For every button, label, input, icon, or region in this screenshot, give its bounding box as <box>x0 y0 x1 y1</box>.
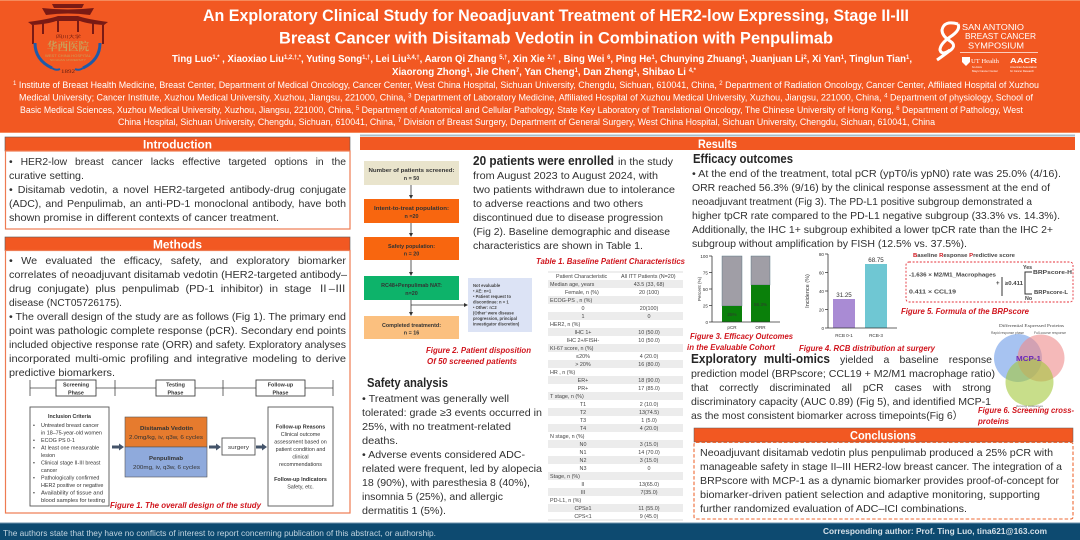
table 1: baseline characteristics: 0 <box>648 466 650 472</box>
caption: figure 2 <box>426 345 531 366</box>
intro text: (ADC), and Penpulimab, an anti-PD-1 monoclonal antibody, have both <box>9 199 346 210</box>
arrow <box>256 444 267 450</box>
inclusion criteria box: in 18–75-year-old women <box>41 430 102 436</box>
safety text: related were frequent, led by alopecia <box>362 464 542 475</box>
not evaluable box: investigator discretion) <box>473 322 520 326</box>
inclusion criteria box: Clinical stage II-III breast <box>41 460 101 466</box>
table 1: baseline characteristics: 43.5 (33, 68) <box>634 282 664 288</box>
logo: San Antonio Breast Cancer Symposium: UT Health <box>971 59 999 65</box>
figure 5: BRPscore formula: BRPscore-L <box>1034 290 1069 296</box>
panel: methods <box>5 237 350 513</box>
table 1: baseline characteristics: 16 (80.0) <box>638 362 660 368</box>
follow-up box: Clinical outcome <box>281 432 320 438</box>
methods text: correlates of neoadjuvant disitamab vedotin (HER2-targeted antibody– <box>9 270 347 281</box>
intro text: • Disitamab vedotin, a novel HER2-targeted antibody-drug conjugate <box>9 185 346 196</box>
inclusion criteria box: Availability of tissue and <box>41 490 103 496</box>
caption: table 1: Table 1. Baseline Patient Characteristics <box>536 256 685 266</box>
figure 3: efficacy bar chart: 25% <box>727 312 737 317</box>
logo: San Antonio Breast Cancer Symposium: Mays Cancer Center <box>972 69 998 73</box>
table 1: baseline characteristics: 7(35.0) <box>640 490 658 496</box>
figure 6: Venn diagram: Among outcomes <box>1016 404 1044 408</box>
table 1: baseline characteristics: T1 <box>580 402 586 408</box>
phase timeline: Testing <box>166 382 185 388</box>
header band <box>0 0 1080 133</box>
figure 2: patient disposition flowchart: Completed treatmentd: <box>382 323 441 329</box>
figure 6: Venn diagram: Differential Expressed Proteins <box>999 323 1064 328</box>
table 1: baseline characteristics: N stage, n (%) <box>550 434 585 440</box>
phase timeline: Follow-up <box>268 382 294 388</box>
caption: figure 3 <box>687 331 793 352</box>
follow-up box: Safety, etc. <box>287 484 314 490</box>
methods text: incorporated multi-omic profiling and integrative modeling to derive <box>9 354 346 365</box>
heading: Methods: Methods <box>153 238 202 252</box>
figure 5: BRPscore formula: + <box>996 281 1000 287</box>
treatment box: Disitamab Vedotin <box>140 426 193 432</box>
methods text: drug conjugate) plus penpulimab (PD-1 inhibitor) in stage Ⅱ–Ⅲ <box>9 284 346 295</box>
figure 4: RCB bar chart: 31.25 <box>836 292 852 299</box>
follow-up box: patient condition and <box>276 447 325 453</box>
caption: figure 3: Figure 3. Efficacy Outcomes <box>690 331 793 341</box>
inclusion criteria box: • <box>33 446 35 452</box>
affiliations: Medical University; Cancer Institute, Xuzhou Medical University, Xuzhou, Jiangsu, 221000, China, 3 Department of Laboratory Medicine, Affiliated Hospital of Xuzhou Medical University, Xuzhou, Jiangsu, 221000, China, 4 Department of physiology, School of <box>19 92 1034 102</box>
table 1: baseline characteristics: PR+ <box>578 386 588 392</box>
exploratory multi-omics text <box>691 352 995 422</box>
exploratory multi-omics text: that correctly discriminated all pCR cases with strong <box>691 383 991 394</box>
figure 2: patient disposition flowchart: n=20 <box>405 291 418 297</box>
panel: conclusions <box>694 428 1073 519</box>
methods text <box>9 256 347 379</box>
logo: San Antonio Breast Cancer Symposium: for Cancer Research <box>1010 69 1034 73</box>
caption: figure 6: proteins <box>977 416 1009 426</box>
exploratory multi-omics text: as the most consistent biomarker across timepoints(Fig 6） <box>691 410 963 422</box>
table 1: baseline characteristics <box>536 256 685 520</box>
not evaluable box <box>468 278 532 332</box>
inclusion criteria box <box>30 407 109 506</box>
table 1: baseline characteristics: 13(65.0) <box>639 482 659 488</box>
enrollment text: (Fig 2). Baseline demographic and disease <box>473 227 670 238</box>
figure 5: BRPscore formula: ≥0.411 <box>1005 281 1023 287</box>
treatment box <box>125 417 207 477</box>
title: An Exploratory Clinical Study for Neoadjuvant Treatment of HER2-low Expressing, Stage II-III <box>203 6 909 25</box>
figure 2: patient disposition flowchart: Safety population: <box>388 244 435 250</box>
figure 4: RCB bar chart <box>799 252 936 353</box>
exploratory multi-omics text: yielded a baseline response <box>840 355 992 366</box>
figure 4: RCB bar chart: Incidence (%) <box>805 274 811 308</box>
logo: West China Hospital: WEST CHINA HOSPITAL <box>45 54 91 58</box>
authors: Ting Luo1,* , Xiaoxiao Liu1,2,†,*, Yuting Song1,†, Lei Liu3,4,†, Aaron Qi Zhang 5,†, Xin Xie 2,† , Bing Wei 6, Ping He1, Chunying Zhuang1, Juanjuan Li2, Xi Yan1, Tinglun Tian1, <box>172 54 912 65</box>
logo: San Antonio Breast Cancer Symposium: BREAST CANCER <box>965 31 1036 41</box>
inclusion criteria box: • <box>33 460 35 466</box>
follow-up box: assessment based on <box>274 440 327 446</box>
phase timeline <box>30 380 333 396</box>
figure 2: patient disposition flowchart <box>364 161 532 366</box>
enrollment text: discontinued due to disease progression <box>473 213 663 224</box>
table 1: baseline characteristics: 10 (50.0) <box>638 338 660 344</box>
figure 4: RCB bar chart: RCB-3 <box>869 333 883 338</box>
figure 4: RCB bar chart: 20 <box>819 308 824 312</box>
table 1: baseline characteristics: PD-L1, n (%) <box>550 498 581 504</box>
figure 3: efficacy bar chart: 50 <box>703 287 708 292</box>
table 1: baseline characteristics: CPS≥1 <box>574 506 592 512</box>
affiliations <box>13 80 1039 127</box>
figure 4: RCB bar chart: RCB 0-1 <box>835 333 853 338</box>
table 1: baseline characteristics: IHC 2+/FISH- <box>567 338 599 344</box>
figure 2: patient disposition flowchart: n = 16 <box>404 330 419 336</box>
exploratory multi-omics text: Exploratory multi-omics <box>691 352 830 366</box>
intro text <box>9 157 346 224</box>
logo: San Antonio Breast Cancer Symposium: SYMPOSIUM <box>968 40 1024 50</box>
inclusion criteria box: • <box>33 423 35 429</box>
table 1: baseline characteristics: N2 <box>580 458 586 464</box>
table 1: baseline characteristics: 0 <box>582 306 584 312</box>
logo: West China Hospital: 四川大学 <box>56 33 81 39</box>
safety text: tolerated: grade ≥3 events occurred in <box>362 408 542 419</box>
phase timeline: Phase <box>273 390 288 396</box>
logo: San Antonio Breast Cancer Symposium: San Antonio <box>972 65 982 69</box>
surgery box <box>222 438 255 455</box>
table 1: baseline characteristics: HER2, n (%) <box>550 322 580 328</box>
safety text: dermatitis 1 (5%). <box>362 506 446 517</box>
figure 4: RCB bar chart: 80 <box>819 252 824 257</box>
intro text: • HER2-low breast cancer lacks effective targeted options in the <box>9 157 346 168</box>
heading: Results: Results <box>698 139 737 151</box>
logo: San Antonio Breast Cancer Symposium: SAN ANTONIO <box>962 22 1024 32</box>
figure 2: patient disposition flowchart: RC48+Penpulimab NAT: <box>381 283 442 289</box>
not evaluable box: • Patient request to <box>473 294 511 299</box>
methods text: • We evaluated the efficacy, safety, and exploratory biomarker <box>9 256 347 267</box>
figure 2: patient disposition flowchart: Intent-to-treat population: <box>374 206 449 212</box>
table 1: baseline characteristics: 0 <box>648 314 650 320</box>
table 1: baseline characteristics: Median age, years <box>550 282 595 288</box>
heading: safety analysis: Safety analysis <box>367 376 448 390</box>
follow-up box <box>268 407 333 506</box>
surgery box: surgery <box>228 445 249 451</box>
figure 2: patient disposition flowchart: n =20 <box>405 214 418 220</box>
inclusion criteria box: lesion <box>41 453 55 459</box>
follow-up box: Follow-up Reasons <box>276 424 325 430</box>
phase timeline: Phase <box>68 390 84 396</box>
table 1: baseline characteristics: 18 (90.0) <box>638 378 660 384</box>
phase timeline: Phase <box>168 390 183 396</box>
panel: results <box>360 134 1075 520</box>
figure 6: Venn diagram: MCP-1 <box>1016 354 1041 363</box>
efficacy outcomes <box>692 152 1061 250</box>
treatment box: 200mg, iv, q3w, 6 cycles <box>133 465 200 471</box>
figure 2: patient disposition flowchart: n = 50 <box>404 176 419 182</box>
table 1: baseline characteristics: 1 <box>582 314 584 320</box>
table 1: baseline characteristics: N1 <box>580 450 586 456</box>
figure 5: BRPscore formula <box>901 253 1073 316</box>
intro text: shown promise in different contexts of cancer treatment. <box>9 213 279 224</box>
methods text: • The overall design of the study are as follows (Fig 1). The primary end <box>9 312 346 323</box>
methods text: disease (NCT05726175). <box>9 298 122 309</box>
caption: figure 2: Of 50 screened patients <box>427 356 517 366</box>
table 1: baseline characteristics: ECOG-PS , n (%) <box>550 298 592 304</box>
inclusion criteria box: At least one measurable <box>41 446 99 452</box>
inclusion criteria box: • <box>33 490 35 496</box>
efficacy text: ORR reached 56.3% (9/16) by the clinical response assessment at the end of <box>692 183 1050 194</box>
logo: West China Hospital <box>28 4 108 75</box>
arrow <box>209 444 221 450</box>
follow-up box: Follow-up Indicators <box>274 477 327 483</box>
table 1: baseline characteristics: IHC 1+ <box>575 330 591 336</box>
inclusion criteria box: • <box>33 438 35 444</box>
safety text: deaths. <box>362 436 398 447</box>
figure 3: efficacy bar chart: 75 <box>703 270 708 276</box>
efficacy text: higher tpCR rate compared to the PD-L1 negative subgroup (33.3% vs. 14.3%). <box>692 211 1060 222</box>
title <box>203 6 909 48</box>
safety text: • Treatment was generally well <box>362 394 509 405</box>
figure 4: RCB bar chart: 0 <box>821 326 824 331</box>
logo: San Antonio Breast Cancer Symposium: AACR <box>1010 56 1038 65</box>
table 1: baseline characteristics: Female, n (%) <box>565 290 599 296</box>
follow-up box: clinical <box>292 454 309 460</box>
authors: Xiaorong Zhong1, Jie Chen7, Yan Cheng1, Dan Zheng1, Shibao Li 4,* <box>392 67 697 78</box>
exploratory multi-omics text: prediction model (BRPscore; CCL19 + M2/M1 macrophage ratio) <box>691 369 995 380</box>
table 1: baseline characteristics: 20(100) <box>640 306 658 312</box>
treatment box: 2.0mg/kg, iv, q3w, 6 cycles <box>129 435 203 441</box>
table 1: baseline characteristics: CPS<1 <box>574 514 592 520</box>
table 1: baseline characteristics: Ⅲ <box>580 490 586 496</box>
caption: figure 3: in the Evaluable Cohort <box>687 342 776 352</box>
efficacy text: neoadjuvant treatment (Fig 3). The PD-L1 positive subgroup demonstrated a <box>692 197 1032 208</box>
efficacy text: • At the end of the treatment, total pCR (ypT0/is ypN0) rate was 25.0% (4/16). <box>692 169 1061 180</box>
table 1: baseline characteristics: 10 (50.0) <box>638 330 660 336</box>
table 1: baseline characteristics: Stage, n (%) <box>550 474 580 480</box>
conclusions text: Neoadjuvant disitamab vedotin plus penpulimab produced a 25% pCR with <box>700 448 1053 459</box>
conclusions text: BRPscore with MCP-1 as a dynamic biomarker provides proof-of-concept for <box>700 476 1060 487</box>
table 1: baseline characteristics: T stage, n (%) <box>550 394 584 400</box>
table 1: baseline characteristics: 13(74.5) <box>639 410 659 416</box>
table 1: baseline characteristics: ≤20% <box>576 354 590 360</box>
figure 4: RCB bar chart: 60 <box>819 270 824 276</box>
logo: West China Hospital: 华西医院 <box>47 39 89 53</box>
table 1: baseline characteristics: Ⅱ <box>580 482 586 488</box>
safety text: 18 (90%), with paresthesia 8 (40%), <box>362 478 530 489</box>
methods text: predictive biomarkers. <box>9 368 115 379</box>
treatment box: Penpulimab <box>149 456 184 462</box>
caption: figure 5: Figure 5. Formula of the BRPscore <box>901 306 1029 316</box>
figure 1: study design <box>30 380 333 510</box>
table 1: baseline characteristics: T3 <box>580 418 586 424</box>
methods text: included objective response rate (ORR) and safety. Exploratory analyses <box>9 340 346 351</box>
logo: West China Hospital: SICHUAN UNIVERSITY <box>50 58 86 62</box>
title: Breast Cancer with Disitamab Vedotin in Combination with Penpulimab <box>279 28 833 48</box>
intro text: curative setting. <box>9 171 84 182</box>
caption: figure 1: Figure 1. The overall design of the study <box>110 500 262 510</box>
exploratory multi-omics text: discriminatory capacity (AUC 0.89) (Fig 5), and identified MCP-1 <box>691 397 991 408</box>
enrollment text: two patients withdrawn due to intolerance <box>473 185 675 196</box>
not evaluable box: • Other: n=2 <box>473 305 497 310</box>
conclusions text: further randomized evaluation of ADC–ICI combinations. <box>700 504 967 515</box>
table 1: baseline characteristics: 14 (70.0) <box>638 450 660 456</box>
figure 5: BRPscore formula: No <box>1025 296 1033 302</box>
enrollment text: 20 patients were enrolled <box>473 154 614 168</box>
inclusion criteria box: Untreated breast cancer <box>41 423 99 429</box>
figure 3: efficacy bar chart <box>687 254 793 352</box>
safety text: • Adverse events considered ADC- <box>362 450 525 461</box>
table 1: baseline characteristics: 17 (85.0) <box>638 386 660 392</box>
arrow <box>112 444 124 450</box>
table 1: baseline characteristics: > 20% <box>575 362 591 368</box>
inclusion criteria box: Pathologically confirmed <box>41 476 99 482</box>
conclusions text <box>700 448 1062 515</box>
table 1: baseline characteristics: Patient Characteristic <box>556 274 608 280</box>
efficacy text: subgroup without amplification by FISH (12.5% vs. 37.5%). <box>692 239 967 250</box>
table 1: baseline characteristics: N0 <box>580 442 586 448</box>
figure 2: patient disposition flowchart: n = 20 <box>404 252 419 258</box>
efficacy text <box>692 169 1061 250</box>
table 1: baseline characteristics: 20 (100) <box>639 290 659 296</box>
not evaluable box: • AE: n=1 <box>473 288 492 294</box>
follow-up box: recommendations <box>279 462 322 468</box>
caption: figure 6 <box>977 405 1074 426</box>
conclusions text: biomarker-driven patient selection and adaptive monitoring, supporting <box>700 490 1040 501</box>
enrollment text: in the study <box>618 157 674 168</box>
disclosure statement: The authors state that they have no conflicts of interest to report concerning publication of this abstract, or authorship. <box>3 528 436 538</box>
figure 6: Venn diagram: Rapid response phase <box>991 331 1024 335</box>
figure 6: Venn diagram: Full-course response <box>1034 331 1066 335</box>
heading: Conclusions: Conclusions <box>850 428 916 442</box>
heading: Introduction: Introduction <box>143 138 212 152</box>
inclusion criteria box: HER2 positive or negative <box>41 483 103 489</box>
not evaluable box: discontinue: n = 1 <box>473 300 509 304</box>
logo: West China Hospital: 1892 <box>61 69 75 75</box>
affiliations: Basic Medical Sciences, Xuzhou Medical University, Xuzhou, Jiangsu, 221000, China, 5 Department of Anatomical and Cellular Pathology, State Key Laboratory of Translational Oncology, The Chinese University of Hong Kong, 6 Department of Pathology, West <box>20 105 1024 115</box>
table 1: baseline characteristics: 4 (20.0) <box>640 354 658 360</box>
enrollment text: to adverse reactions and two others <box>473 199 643 210</box>
figure 4: RCB bar chart: 68.75 <box>868 257 884 264</box>
caption: figure 4: Figure 4. RCB distribution at surgery <box>799 343 936 353</box>
footer <box>0 522 1080 540</box>
table 1: baseline characteristics: 3 (15.0) <box>640 458 658 464</box>
figure 5: BRPscore formula: -1.636 × M2/M1_Macrophages <box>909 272 996 278</box>
methods text: point was pathologic complete response (pCR). Secondary end points <box>9 326 346 337</box>
table 1: baseline characteristics: 3 (15.0) <box>640 442 658 448</box>
figure 3: efficacy bar chart: 0 <box>705 320 708 325</box>
figure 5: BRPscore formula: BRPscore-H <box>1033 270 1072 276</box>
panel: introduction <box>5 137 350 229</box>
table 1: baseline characteristics: T2 <box>580 410 586 416</box>
safety text <box>362 394 542 517</box>
not evaluable box: Not evaluable <box>473 283 501 288</box>
table 1: baseline characteristics: 1 (5.0) <box>641 418 657 424</box>
figure 5: BRPscore formula: Yes <box>1023 265 1032 271</box>
table 1: baseline characteristics: 11 (55.0) <box>638 506 660 512</box>
table 1: baseline characteristics: HR , n (%) <box>550 370 575 376</box>
conclusions text: manageable safety in stage II–III HER2-low breast cancer. The integration of a <box>700 462 1062 473</box>
inclusion criteria box: blood samples for testing <box>41 498 105 504</box>
inclusion criteria box: Inclusion Criteria <box>48 414 92 420</box>
figure 6: Venn diagram <box>977 323 1074 426</box>
caption: figure 2: Figure 2. Patient disposition <box>426 345 531 355</box>
phase timeline: Screening <box>63 382 89 388</box>
corresponding author: Corresponding author: Prof. Ting Luo, tina621@163.com <box>823 527 1047 536</box>
inclusion criteria box: cancer <box>41 468 57 474</box>
logo: San Antonio Breast Cancer Symposium <box>937 22 1038 73</box>
not evaluable box: progression, principal <box>473 316 517 321</box>
figure 3: efficacy bar chart: Percent (%) <box>697 276 702 301</box>
enrollment text <box>473 154 675 252</box>
figure 5: BRPscore formula: Baseline Response Predictive score <box>913 253 1015 259</box>
figure 5: BRPscore formula: 0.411 × CCL19 <box>909 290 956 296</box>
figure 3: efficacy bar chart: pCR <box>727 325 737 330</box>
affiliations: China Hospital, Sichuan University, Chengdu, Sichuan, 610041, China, 7 Division of Breast Surgery, Department of General Surgery, West China Hospital, Sichuan University, Chengdu, Sichuan, 610041, China <box>118 117 935 127</box>
table 1: baseline characteristics: ER+ <box>578 378 588 384</box>
heading: efficacy outcomes: Efficacy outcomes <box>693 152 793 166</box>
safety text: 25%, with no treatment-related <box>362 422 511 433</box>
inclusion criteria box: ECOG PS 0-1 <box>41 438 75 444</box>
safety analysis <box>362 376 542 517</box>
enrollment text: from August 2023 to August 2024, with <box>473 171 658 182</box>
enrollment text: characteristics are shown in Table 1. <box>473 241 643 252</box>
table 1: baseline characteristics: 2 (10.0) <box>640 402 658 408</box>
safety text: insomnia 5 (25%), and allergic <box>362 492 503 503</box>
figure 3: efficacy bar chart: 100 <box>700 254 708 259</box>
table 1: baseline characteristics: 9 (45.0) <box>640 514 658 520</box>
authors <box>172 54 912 78</box>
figure 2: patient disposition flowchart: Number of patients screened: <box>368 168 455 174</box>
figure 3: efficacy bar chart: 25 <box>703 304 708 308</box>
table 1: baseline characteristics: 4 (20.0) <box>640 426 658 432</box>
affiliations: 1 Institute of Breast Health Medicine, Breast Center, Department of Medical Oncology, Cancer Center, West China Hospital, Sichuan University, Chengdu, Sichuan, 610041, China, 2 Department of Radiation Oncology, Cancer Center, Affiliated Hospital of Xuzhou <box>13 80 1039 90</box>
figure 3: efficacy bar chart: 56.3% <box>754 302 767 307</box>
figure 4: RCB bar chart: 40 <box>819 289 824 294</box>
table 1: baseline characteristics: All ITT Patients (N=20) <box>621 274 676 280</box>
table 1: baseline characteristics: N3 <box>580 466 586 472</box>
table 1: baseline characteristics: T4 <box>580 426 586 432</box>
not evaluable box: (Other' were disease <box>473 310 514 316</box>
table 1: baseline characteristics: KI-67 score, n (%) <box>550 346 594 352</box>
efficacy text: Additionally, the IHC 1+ subgroup exhibited a lower tpCR rate than the IHC 2+ <box>692 225 1053 236</box>
logo: San Antonio Breast Cancer Symposium: American Association <box>1010 65 1037 69</box>
figure 3: efficacy bar chart: ORR <box>755 325 766 330</box>
inclusion criteria box: • <box>33 476 35 482</box>
